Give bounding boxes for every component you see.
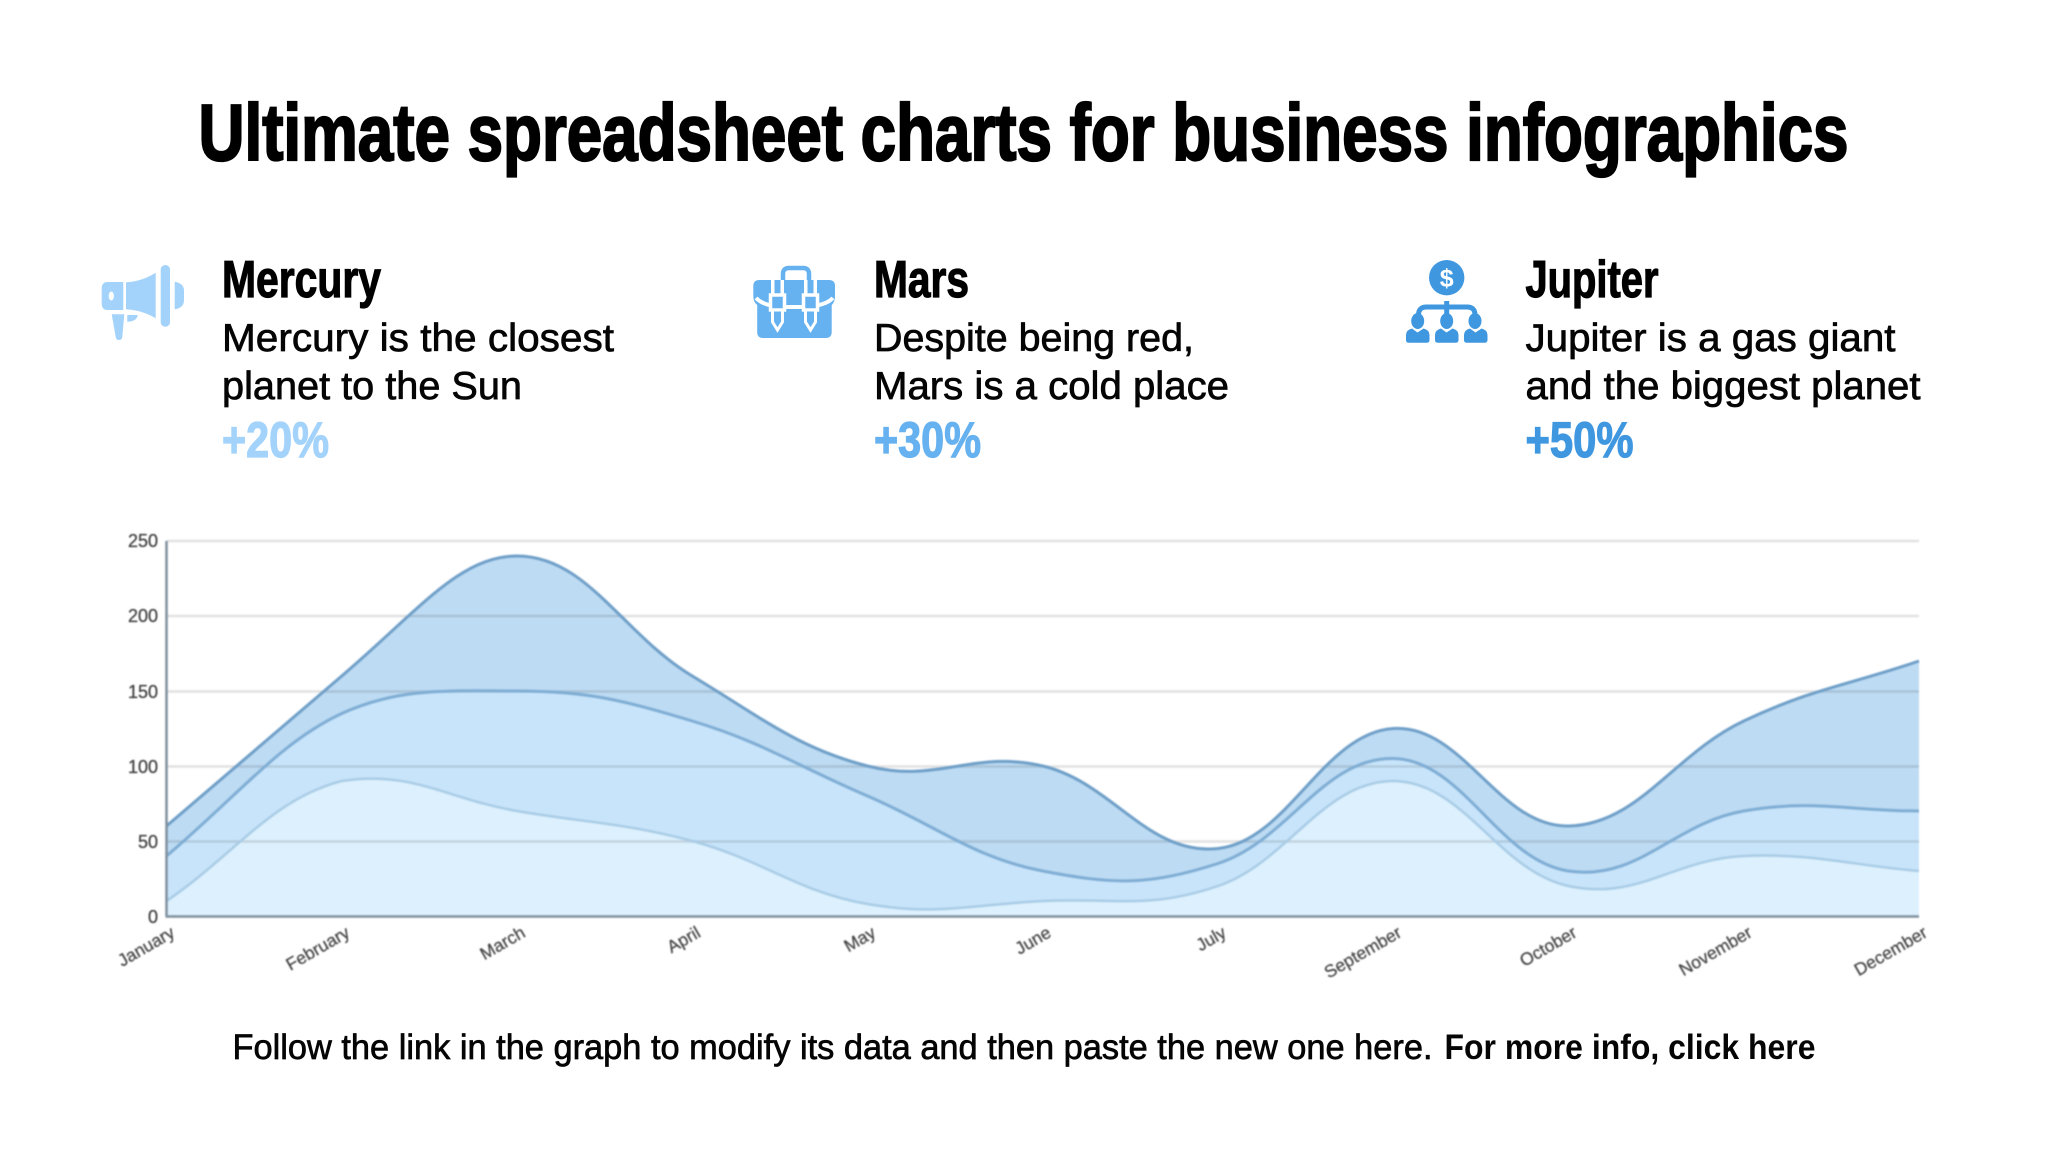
chart line: series 1 xyxy=(166,556,1919,849)
value: +30%: +30% xyxy=(874,412,981,468)
y axis labels: 200 xyxy=(128,606,158,626)
y axis labels: 0 xyxy=(148,907,158,927)
text: Mars description: Mars is a cold place xyxy=(874,365,1229,408)
x axis labels xyxy=(114,922,1931,982)
icon: briefcase xyxy=(753,268,835,338)
y axis labels: 100 xyxy=(128,757,158,777)
x axis labels: February xyxy=(282,922,353,974)
y axis labels xyxy=(128,531,158,927)
x axis labels: January xyxy=(114,922,178,971)
y axis labels: 250 xyxy=(128,531,158,551)
x axis labels: April xyxy=(663,922,704,957)
text: Mercury description xyxy=(222,317,614,408)
footnote: Follow the link in the graph to modify its data and then paste the new one here. xyxy=(232,1028,1432,1067)
heading: Mars: Mars xyxy=(874,251,969,309)
x axis labels: March xyxy=(476,922,528,964)
icon: dollar hierarchy xyxy=(1406,260,1488,343)
value: +50%: +50% xyxy=(1526,412,1634,468)
x axis labels: July xyxy=(1193,922,1230,955)
panel: Jupiter xyxy=(1406,251,1921,468)
heading: Mercury: Mercury xyxy=(222,251,381,309)
chart line: series 3 xyxy=(166,779,1919,909)
chart area: series 2 xyxy=(166,691,1919,916)
panel: Mercury xyxy=(102,251,614,468)
text: Jupiter description: and the biggest planet xyxy=(1526,365,1921,408)
x axis labels: June xyxy=(1011,922,1054,958)
x axis labels: September xyxy=(1321,922,1405,982)
y axis labels: 50 xyxy=(138,832,158,852)
text: Mercury description: planet to the Sun xyxy=(222,365,522,408)
y axis labels: 150 xyxy=(128,682,158,702)
text: Jupiter description xyxy=(1526,317,1921,408)
heading: Jupiter: Jupiter xyxy=(1526,251,1658,309)
chart line: series 2 xyxy=(166,691,1919,881)
icon: dollar hierarchy: $ xyxy=(1440,264,1454,292)
text: Mercury description: Mercury is the closest xyxy=(222,317,614,360)
text: Jupiter description: Jupiter is a gas giant xyxy=(1526,317,1896,360)
footnote: For more info, click here xyxy=(1444,1028,1816,1067)
text: Mars description xyxy=(874,317,1229,408)
icon: megaphone xyxy=(102,265,184,340)
x axis labels: November xyxy=(1675,922,1755,980)
chart area: series 3 xyxy=(166,779,1919,916)
chart axes xyxy=(166,541,1919,916)
x axis labels: May xyxy=(840,922,879,956)
text: Mars description: Despite being red, xyxy=(874,317,1194,360)
value: +20%: +20% xyxy=(222,412,329,468)
x axis labels: October xyxy=(1516,922,1580,971)
panel: Mars xyxy=(753,251,1229,468)
chart area: series 1 xyxy=(166,556,1919,916)
area chart xyxy=(114,531,1931,982)
x axis labels: December xyxy=(1851,922,1931,980)
